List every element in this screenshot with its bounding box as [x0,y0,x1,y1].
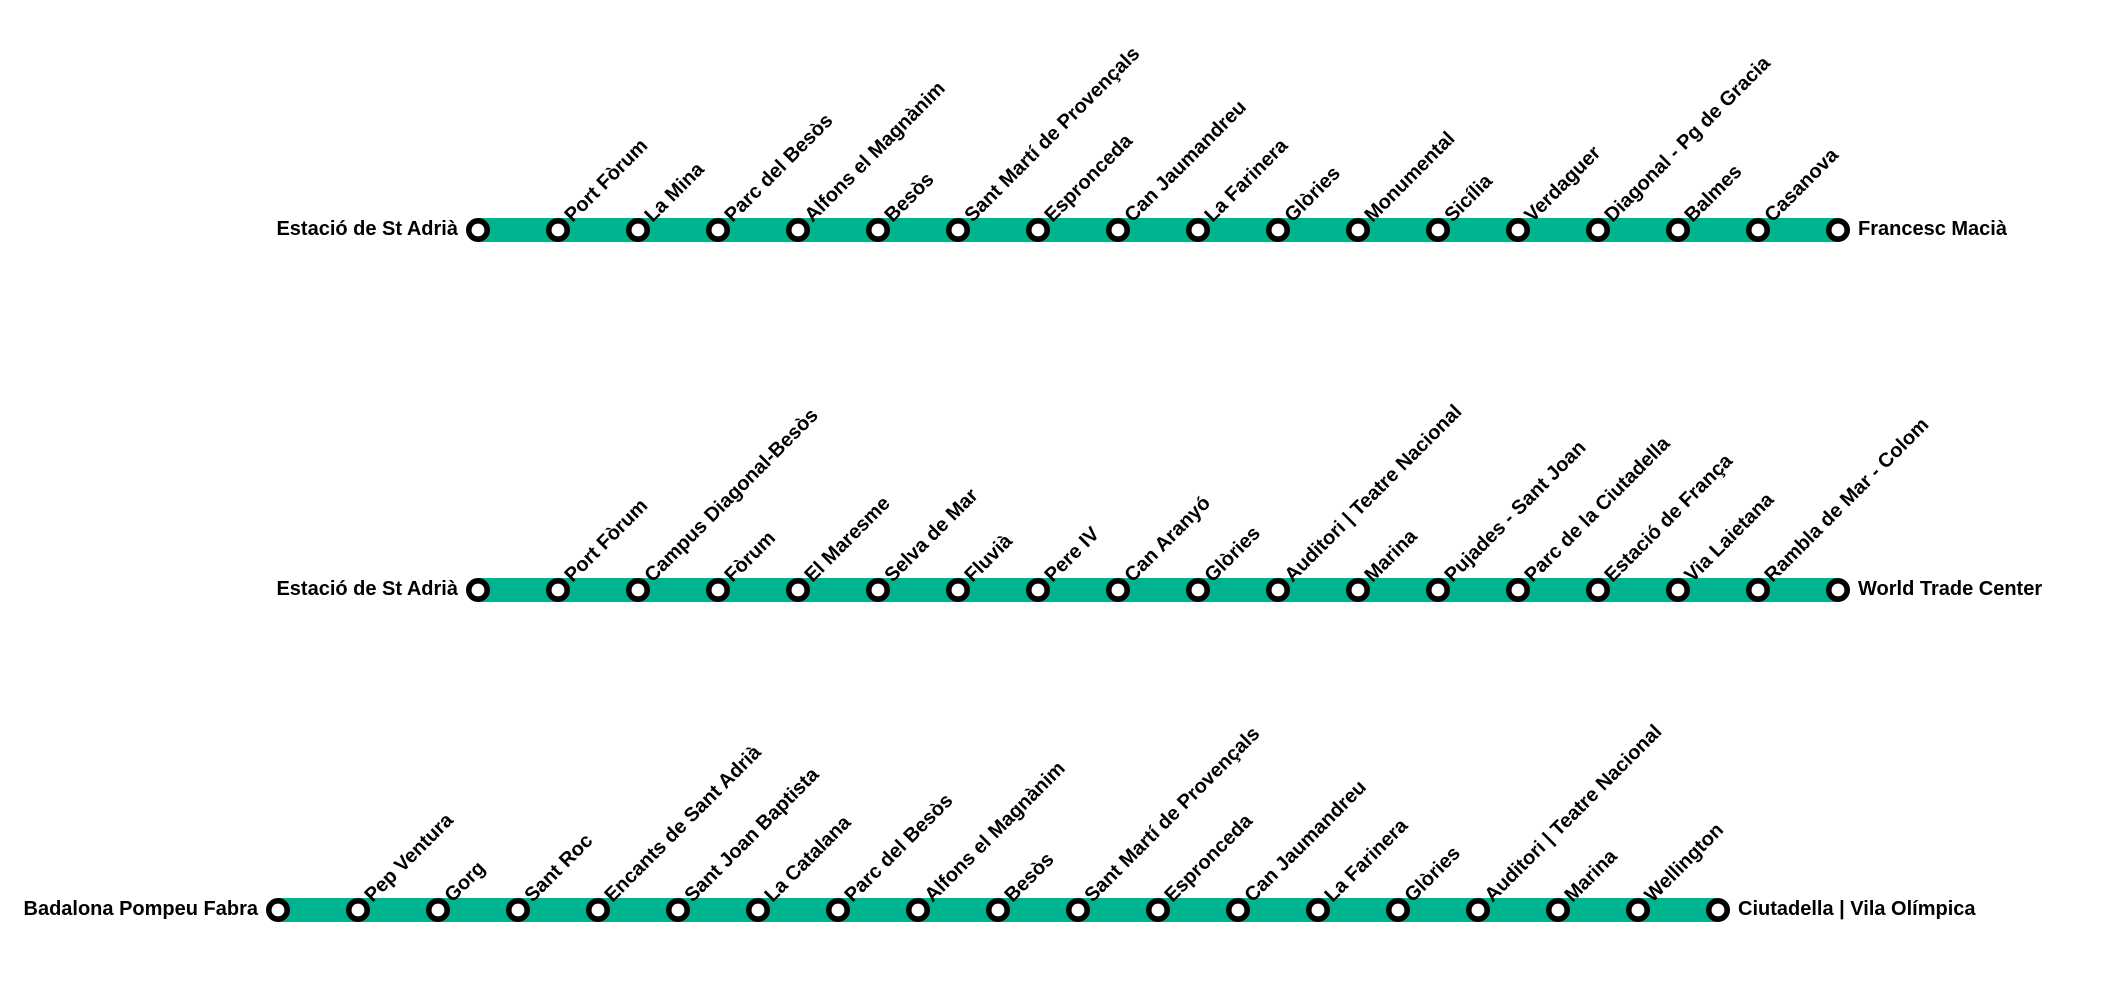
line 3 station labels: Auditori | Teatre Nacional [1480,721,1666,907]
line 1 station labels: Sant Martí de Provençals [960,43,1144,227]
line 2 station labels: Can Aranyó [1120,492,1215,587]
line 2 station labels: Pujades - Sant Joan [1440,437,1590,587]
line 2 station labels: Via Laietana [1680,488,1779,587]
line 2 station labels: Fluvià [960,529,1018,587]
line 1 stations [469,221,1847,239]
line 1 station labels: Diagonal - Pg de Gracia [1600,52,1775,227]
line 1 [276,43,2008,242]
line 1 station labels: La Mina [640,158,709,227]
line 3 station labels: Sant Roc [520,830,597,907]
line 3 station labels: Sant Martí de Provençals [1080,723,1264,907]
line 2 end terminal label: World Trade Center [1858,578,2042,600]
line 1 start terminal label: Estació de St Adrià [276,218,459,240]
line 1 station labels: Besòs [880,169,938,227]
line 1 station labels: Espronceda [1040,129,1138,227]
line 2 station labels: Selva de Mar [880,484,983,587]
line 2 station labels: Estació de França [1600,449,1738,587]
line 2 [276,401,2042,602]
line 1 end terminal label: Francesc Macià [1858,218,2008,240]
line 2 station labels: Marina [1360,525,1422,587]
line 3 station labels: Glòries [1400,842,1465,907]
line 1 station labels: Balmes [1680,161,1746,227]
line 1 station labels [560,43,1843,227]
line 3 station labels: La Farinera [1320,814,1413,907]
line 3 station labels: Parc del Besòs [840,790,957,907]
line 3 station labels: Encants de Sant Adrià [600,741,766,907]
line 1 station labels: Port Fòrum [560,135,652,227]
line 3 station labels: Gorg [440,857,490,907]
line 1 track [478,218,1838,242]
line 3 station labels: Marina [1560,845,1622,907]
line 3 station labels: Pep Ventura [360,809,458,907]
line 2 station labels: Auditori | Teatre Nacional [1280,401,1466,587]
line 3 station labels: Besòs [1000,849,1058,907]
line 3 station labels: La Catalana [760,811,856,907]
line 1 station labels: Sicília [1440,169,1498,227]
line 3 stations [269,901,1727,919]
line 1 station labels: Verdaguer [1520,142,1605,227]
line 3 station labels: Wellington [1640,819,1728,907]
line 1 station labels: Casanova [1760,144,1843,227]
line 2 station labels: Pere IV [1040,523,1104,587]
line 1 station labels: Alfons el Magnànim [800,77,950,227]
line 2 station labels: Rambla de Mar - Colom [1760,414,1933,587]
line 2 stations [469,581,1847,599]
line 2 station labels: Port Fòrum [560,495,652,587]
line 3 station labels [360,721,1728,907]
line 3 station labels: Espronceda [1160,809,1258,907]
line 2 station labels [560,401,1933,587]
line 3 start terminal label: Badalona Pompeu Fabra [24,898,259,920]
line 1 station labels: Can Jaumandreu [1120,96,1251,227]
line 1 station labels: Monumental [1360,128,1459,227]
line 2 station labels: Campus Diagonal-Besòs [640,404,823,587]
line 3 track [278,898,1718,922]
line 3 station labels: Can Jaumandreu [1240,776,1371,907]
line 3 station labels: Sant Joan Baptista [680,763,824,907]
line 2 track [478,578,1838,602]
line 3 station labels: Alfons el Magnànim [920,757,1070,907]
line 1 station labels: Parc del Besòs [720,110,837,227]
line 2 station labels: El Maresme [800,492,895,587]
line 1 station labels: Glòries [1280,162,1345,227]
line 3 [24,721,1976,922]
line 3 end terminal label: Ciutadella | Vila Olímpica [1738,898,1976,920]
line 1 station labels: La Farinera [1200,134,1293,227]
line 2 start terminal label: Estació de St Adrià [276,578,459,600]
line 2 station labels: Parc de la Ciutadella [1520,432,1675,587]
line 2 station labels: Glòries [1200,522,1265,587]
line 2 station labels: Fòrum [720,527,780,587]
